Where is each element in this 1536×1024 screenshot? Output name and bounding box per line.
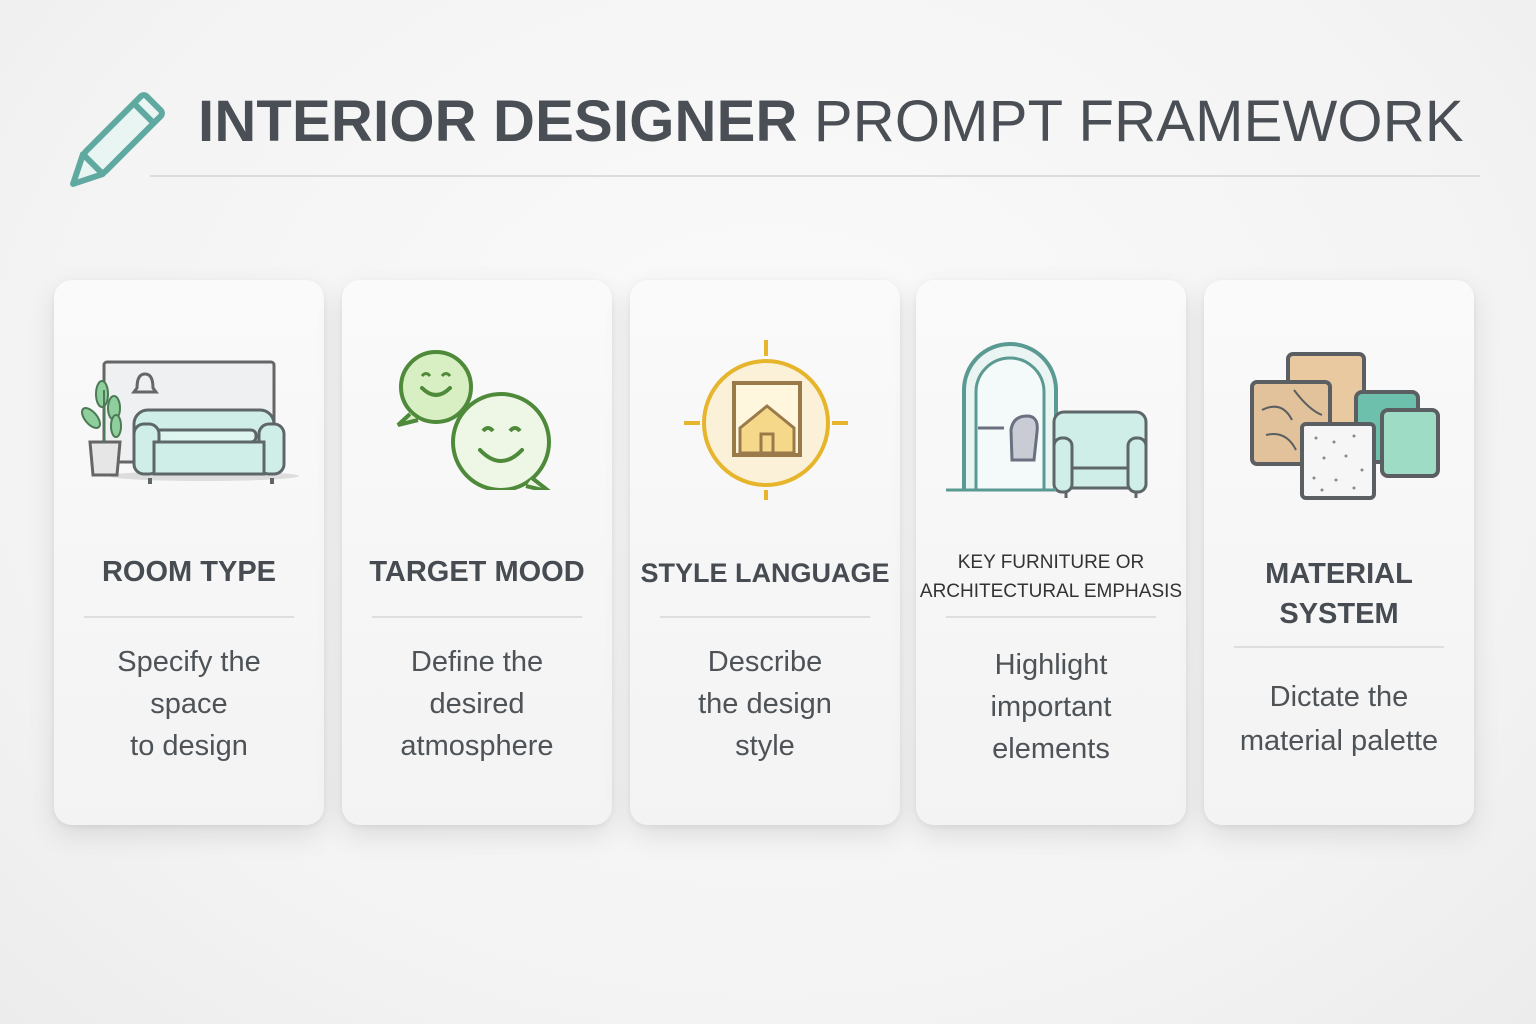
panel: target mood: [342, 280, 612, 825]
text: room type: to design: [130, 730, 248, 762]
text: material system: Dictate the: [1270, 681, 1408, 713]
panel: material system: [1204, 280, 1474, 825]
panel: room type: [54, 280, 324, 825]
icon: target with house: [684, 340, 848, 500]
text: key furniture: Highlight: [995, 649, 1107, 681]
text: target mood: desired: [429, 688, 525, 720]
icon: sofa: [81, 360, 299, 484]
heading: material system: [1265, 558, 1413, 630]
icon: arch and chair: [946, 342, 1148, 498]
icon: pencil: [70, 92, 165, 187]
text: key furniture: elements: [992, 733, 1110, 765]
heading: material system: MATERIAL: [1265, 558, 1413, 590]
heading: material system: SYSTEM: [1279, 598, 1399, 630]
text: material system: material palette: [1240, 725, 1438, 757]
text: style language: style: [735, 730, 795, 762]
text: material system: [1240, 681, 1438, 757]
heading: target mood: TARGET MOOD: [369, 556, 585, 588]
text: target mood: atmosphere: [400, 730, 554, 762]
heading: key furniture: KEY FURNITURE OR: [958, 552, 1144, 573]
text: style language: Describe: [708, 646, 822, 678]
text: style language: the design: [698, 688, 832, 720]
text: target mood: [400, 646, 554, 762]
text: key furniture: important: [991, 691, 1111, 723]
icon: material swatches: [1250, 352, 1440, 500]
heading: key furniture: ARCHITECTURAL EMPHASIS: [920, 581, 1182, 602]
heading: room type: ROOM TYPE: [102, 556, 276, 588]
text: room type: [117, 646, 261, 762]
panel: key furniture: [916, 280, 1186, 825]
text: key furniture: [991, 649, 1112, 765]
text: style language: [698, 646, 832, 762]
heading: key furniture: [920, 552, 1182, 602]
panel: style language: [630, 280, 900, 825]
text: target mood: Define the: [411, 646, 543, 678]
heading: style language: STYLE LANGUAGE: [640, 558, 890, 588]
icon: smiley bubbles: [396, 350, 551, 490]
text: room type: space: [150, 688, 228, 720]
title: INTERIOR DESIGNER PROMPT FRAMEWORK: [198, 89, 1464, 154]
text: room type: Specify the: [117, 646, 261, 678]
